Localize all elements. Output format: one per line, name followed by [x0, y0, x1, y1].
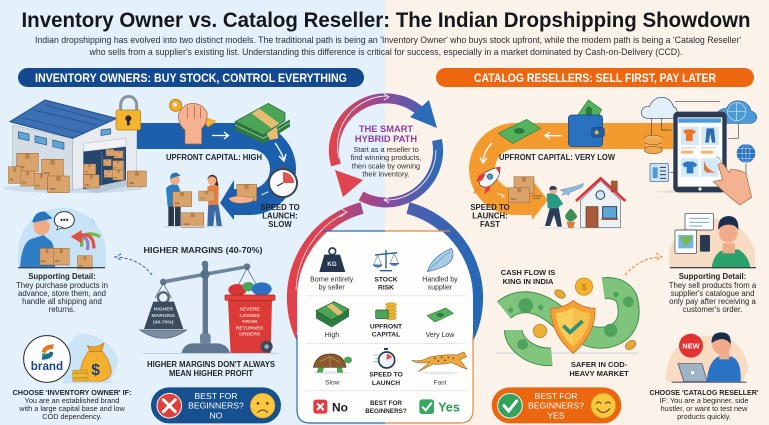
label: safer in cod: SAFER IN COD-	[571, 360, 628, 369]
icon: person on laptop with new badge	[666, 332, 748, 383]
label: speed to launch slow: SLOW	[268, 220, 292, 229]
label: speed to launch slow	[260, 203, 300, 229]
icon: workers exchanging box	[163, 173, 223, 228]
label: speed to launch slow: SPEED TO	[260, 203, 300, 212]
row: speed to launch: SPEED TO	[369, 372, 403, 379]
icon: worker with returns	[18, 208, 106, 269]
chart: balance scale: ORDERS	[239, 332, 261, 338]
text: supporting detail: They sell products from a	[669, 281, 757, 290]
icon: hand with box	[228, 184, 268, 203]
text: supporting detail: advance, store them, and	[18, 289, 106, 298]
row: upfront capital	[316, 302, 455, 339]
chart: balance scale: (40-70%)	[153, 319, 174, 325]
text: choose catalog reseller: IF: You are a beginner, side	[660, 396, 748, 405]
row: upfront capital: Very Low	[426, 332, 455, 339]
row: upfront capital: CAPITAL	[372, 332, 400, 339]
divider	[306, 389, 466, 392]
heading pill: catalog resellers: CATALOG RESELLERS: SELL FIRST, PAY LATER	[474, 73, 717, 85]
callout: best for beginners no: BEGINNERS?	[188, 401, 244, 411]
row: best for beginners	[313, 399, 460, 415]
label: speed to launch fast: SPEED TO	[470, 203, 510, 212]
icon: money ribbon and shield	[496, 278, 639, 357]
label: speed to launch slow: LAUNCH:	[262, 212, 298, 220]
icon: cloud network and tablet	[641, 97, 757, 205]
text: choose inventory owner	[12, 388, 132, 421]
row: stock risk: STOCK	[374, 277, 398, 284]
row: upfront capital: UPFRONT	[370, 324, 402, 331]
callout: best for beginners yes: BEST FOR	[534, 391, 578, 401]
arrow: white right	[212, 132, 228, 139]
heading: smart hybrid path: THE SMART	[359, 124, 413, 134]
label: margins warning: MEAN HIGHER PROFIT	[169, 369, 253, 378]
icon: banknote	[498, 119, 562, 143]
chart: balance scale: FROM	[242, 319, 257, 325]
text: choose inventory owner: CHOOSE 'INVENTORY OWNER' IF:	[12, 388, 132, 397]
icon: money ribbon and shield: $	[582, 282, 587, 292]
row: speed to launch: LAUNCH	[372, 380, 400, 387]
chart: balance scale: HIGHER	[154, 307, 173, 313]
intro text	[35, 34, 741, 57]
divider	[306, 294, 466, 297]
label: speed to launch fast	[470, 203, 510, 229]
table card	[297, 231, 473, 423]
heading: smart hybrid path	[355, 124, 417, 144]
text: choose catalog reseller: hustler, or want to test new	[661, 404, 748, 413]
chart: balance scale: MARGINS	[152, 313, 176, 319]
text: hybrid description	[351, 145, 421, 178]
text: hybrid description: find winning products,	[351, 153, 421, 162]
text: supporting detail: returns.	[49, 305, 75, 314]
icon: stopwatch	[269, 166, 297, 197]
chart: balance scale: LOSSES	[240, 313, 260, 319]
chart: balance scale: SEVERE	[240, 307, 260, 313]
flow arrow: blue	[137, 136, 283, 220]
background: left half	[0, 0, 385, 425]
label: cash flow: CASH FLOW IS	[501, 268, 555, 277]
text: choose inventory owner: COD dependency.	[42, 412, 102, 421]
icon: person on laptop with new badge: NEW	[682, 341, 700, 350]
row: stock risk	[310, 248, 458, 292]
row: speed to launch	[313, 348, 467, 387]
label: speed to launch fast: LAUNCH:	[472, 212, 508, 220]
chart: balance scale: RETURNED	[236, 325, 264, 331]
dashed arrow: to supporting detail	[625, 253, 662, 275]
text: choose inventory owner: with a large capital base and low	[18, 404, 125, 413]
icon: brand logo and money bag	[24, 333, 118, 383]
text: choose catalog reseller: CHOOSE 'CATALOG RESELLER'	[650, 388, 759, 397]
panel: comparison table	[293, 208, 477, 423]
label: safer in cod	[569, 360, 629, 378]
arrow: white curve orange	[480, 143, 492, 163]
icon: cash stack	[235, 103, 290, 143]
icon: warehouse	[3, 100, 146, 193]
label: speed to launch fast: FAST	[480, 220, 500, 229]
row: upfront capital: High	[325, 332, 339, 339]
panel: smart hybrid path	[334, 94, 438, 203]
dashed arrow: to supporting detail	[115, 254, 152, 275]
arrow: white curve	[275, 143, 286, 161]
chart: outer arc left	[293, 208, 362, 340]
row: best for beginners: BEST FOR	[370, 400, 402, 407]
arrow: white accents on outer arc	[296, 209, 347, 290]
callout: best for beginners no	[151, 387, 281, 423]
icon: person with plane and home	[540, 178, 625, 229]
icon: brand logo and money bag: $	[91, 362, 100, 379]
label: margins warning	[147, 360, 275, 378]
icon: worker with returns: •••	[60, 216, 69, 225]
row: stock risk: by seller	[319, 285, 345, 292]
text: supporting detail: They purchase products in	[16, 281, 108, 290]
row: stock risk: Borne entirely	[310, 277, 354, 284]
heading: smart hybrid path: HYBRID PATH	[355, 134, 417, 144]
text: supporting detail: handle all shipping and	[22, 297, 102, 306]
callout: best for beginners yes: YES	[547, 411, 565, 421]
label: margins warning: HIGHER MARGINS DON'T ALWAYS	[147, 360, 275, 369]
chart: balance scale	[140, 261, 279, 354]
panel: inventory owners	[3, 96, 300, 423]
arrow: ring top	[334, 98, 437, 165]
text: supporting detail: only pay after receiving a	[669, 297, 756, 306]
text: supporting detail: Supporting Detail:	[28, 272, 96, 281]
text: supporting detail	[16, 272, 108, 314]
text: supporting detail: supplier's catalogue and	[671, 289, 754, 298]
icon: parcels	[497, 177, 542, 203]
chart: outer arc right	[408, 208, 477, 340]
label: cash flow	[501, 268, 555, 286]
row: best for beginners: Yes	[438, 400, 460, 414]
row: speed to launch: Slow	[325, 379, 340, 386]
row: stock risk: KG	[327, 261, 337, 268]
row: stock risk: RISK	[378, 285, 394, 292]
text: hybrid description: Start as a reseller to	[353, 145, 419, 154]
row: speed to launch: Fast	[434, 379, 447, 386]
text: hybrid description: then scale by owning	[352, 162, 420, 170]
text: choose catalog reseller	[650, 388, 759, 421]
row: stock risk: supplier	[428, 285, 453, 292]
flow arrow: orange	[482, 136, 673, 220]
icon: reseller with phone	[669, 213, 756, 268]
callout: best for beginners yes	[492, 387, 621, 423]
icon: rocket	[473, 167, 500, 194]
label: cash flow: KING IN INDIA	[503, 277, 554, 286]
callout: best for beginners yes: BEGINNERS?	[528, 401, 584, 411]
row: best for beginners: No	[332, 400, 348, 414]
background: right half	[385, 0, 769, 425]
row: stock risk: Handled by	[422, 277, 458, 284]
title: Inventory Owner vs. Catalog Reseller: The Indian Dropshipping Showdown	[22, 9, 750, 32]
row: best for beginners: BEGINNERS?	[365, 408, 407, 415]
callout: best for beginners no: BEST FOR	[194, 391, 238, 401]
label: safer in cod: HEAVY MARKET	[569, 369, 629, 378]
icon: wallet	[568, 100, 604, 147]
intro text: who sells from a supplier's existing list. Understanding this difference is critical for success, especially in a market dominated by Cash-on-Delivery (CCD).	[89, 46, 683, 57]
arrow: ring bottom	[335, 140, 438, 202]
label: upfront capital high: UPFRONT CAPITAL: HIGH	[166, 153, 262, 162]
text: choose catalog reseller: products quickly.	[677, 412, 731, 421]
panel: catalog resellers	[470, 97, 759, 423]
divider	[306, 342, 466, 345]
text: hybrid description: their inventory.	[362, 170, 410, 178]
table contents	[306, 248, 467, 415]
heading pill: inventory owners	[18, 68, 364, 87]
text: choose inventory owner: You are an established brand	[25, 396, 119, 405]
text: supporting detail	[669, 272, 757, 314]
text: supporting detail: Supporting Detail:	[679, 272, 746, 281]
arrow: white ring accents	[338, 94, 436, 203]
heading pill: inventory owners: INVENTORY OWNERS: BUY STOCK, CONTROL EVERYTHING	[35, 73, 347, 85]
text: supporting detail: customer's order.	[683, 305, 742, 314]
label: upfront capital very low: UPFRONT CAPITAL: VERY LOW	[499, 153, 615, 162]
icon: brand logo and money bag: brand	[31, 360, 63, 373]
icon: padlock	[116, 96, 141, 130]
icon: key in fist	[170, 99, 213, 144]
callout: best for beginners no: NO	[209, 411, 223, 421]
heading pill: catalog resellers	[436, 68, 754, 87]
intro text: Indian dropshipping has evolved into two distinct models. The traditional path is being an 'Inventory Owner' who buys stock upfront, while the modern path is being a 'Catalog Reseller'	[35, 34, 741, 45]
label: higher margins: HIGHER MARGINS (40-70%)	[144, 246, 263, 255]
